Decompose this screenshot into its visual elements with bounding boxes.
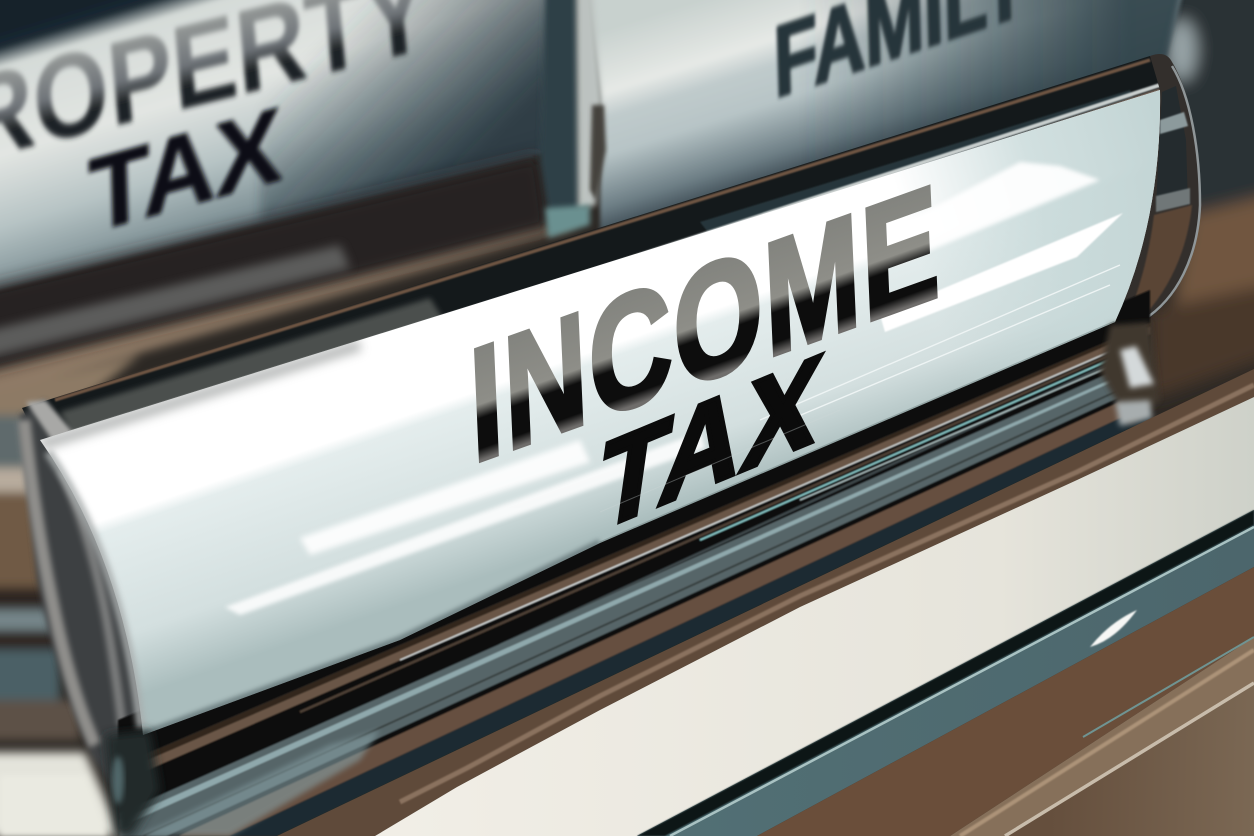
rib thin brown line <box>300 342 1140 712</box>
right face shading <box>915 90 1160 376</box>
tab face <box>585 0 1185 240</box>
lower edge shadow <box>143 543 600 735</box>
light edge stripe <box>1005 683 1254 836</box>
lower left paper corner <box>0 752 122 836</box>
cap base <box>1112 54 1201 325</box>
white label face <box>40 90 1160 735</box>
rib highlight <box>120 362 1150 827</box>
foot base <box>1100 322 1160 425</box>
rib dark teal <box>229 404 1150 836</box>
glass band <box>637 510 1254 836</box>
chrome right end <box>1112 54 1201 325</box>
paper sheet <box>375 397 1254 836</box>
tab chrome edge dark <box>540 0 580 235</box>
wood highlight <box>960 650 1254 836</box>
lower left glare <box>300 440 590 555</box>
band base <box>637 510 1254 836</box>
teal foot bit <box>112 756 124 804</box>
chrome top band upper brown line <box>55 60 1150 400</box>
lower left chrome blend <box>105 730 380 836</box>
inner light strip <box>62 470 122 725</box>
panel: family tab <box>540 0 1185 240</box>
outer chrome <box>20 400 150 815</box>
light line <box>670 527 1254 836</box>
chrome lower light line <box>70 85 1160 433</box>
soft face left edge <box>48 452 141 728</box>
label: income: INCOME <box>467 150 944 498</box>
dark blend <box>105 730 160 836</box>
ribs base <box>118 290 1150 836</box>
chrome lower brown line <box>70 90 1160 438</box>
cap stripe light lower <box>1156 188 1190 212</box>
reflected lines across tax <box>600 410 840 512</box>
streak <box>225 432 705 615</box>
panel: property tax tab <box>0 0 550 374</box>
reflections under tab <box>0 245 350 362</box>
label: tax: TAX <box>590 326 832 560</box>
cap brown lower <box>1130 205 1192 315</box>
wood base <box>757 567 1254 836</box>
streak <box>880 213 1123 332</box>
rib cyan line <box>700 351 1130 540</box>
rib brown lower <box>179 388 1150 836</box>
rib dark line <box>143 376 1150 836</box>
dark edge <box>637 510 1254 836</box>
tab right shading <box>260 0 550 225</box>
rib brown <box>120 327 1150 782</box>
tab chrome highlight <box>576 0 602 210</box>
strip base <box>277 369 1254 836</box>
rib white line <box>400 343 1130 660</box>
label: tax: TAX <box>87 85 283 256</box>
top left band fade <box>40 345 360 445</box>
glint <box>1090 610 1137 647</box>
foot highlight <box>1120 346 1154 388</box>
tab dark streak <box>590 105 606 200</box>
lower wood <box>1007 683 1254 836</box>
chrome ribs under label <box>118 290 1150 836</box>
upper right glare <box>930 160 1099 252</box>
strip highlight <box>400 385 1254 802</box>
corner fill <box>0 775 108 836</box>
chrome top band teal reflection <box>700 90 1135 235</box>
teal thin line <box>1083 637 1254 737</box>
faint lines <box>800 284 1110 416</box>
chrome top band gray left <box>60 298 445 440</box>
cap stripe light <box>1160 112 1188 134</box>
tab teal foot <box>545 205 590 238</box>
face details <box>40 60 1180 735</box>
tab right shading <box>760 0 1185 190</box>
foot lower <box>1115 400 1152 426</box>
corner highlight <box>26 400 78 452</box>
lower sheen <box>140 730 380 836</box>
corner base <box>0 752 122 836</box>
brown strip below tab <box>277 369 1254 836</box>
background: top right dark area <box>1130 0 1254 400</box>
chrome left end <box>20 400 150 815</box>
rib gray-teal <box>120 355 1150 836</box>
cap rim <box>1140 66 1200 322</box>
right foot chrome <box>1100 322 1160 426</box>
cap stripes upper <box>1156 86 1188 205</box>
rib mid teal line <box>800 358 1130 500</box>
tab face <box>0 0 550 295</box>
rib brown upper <box>120 323 1150 780</box>
outer light rim <box>24 420 95 745</box>
background: blurred shelf left <box>0 225 580 740</box>
chrome top band <box>22 56 1172 448</box>
rib thin brown line <box>500 350 1140 645</box>
lighter wood band <box>950 637 1254 836</box>
shelf under tab <box>0 155 550 374</box>
lower right edge shadow <box>600 322 1115 543</box>
wood lower right <box>757 567 1254 836</box>
faint lines <box>760 265 1120 420</box>
